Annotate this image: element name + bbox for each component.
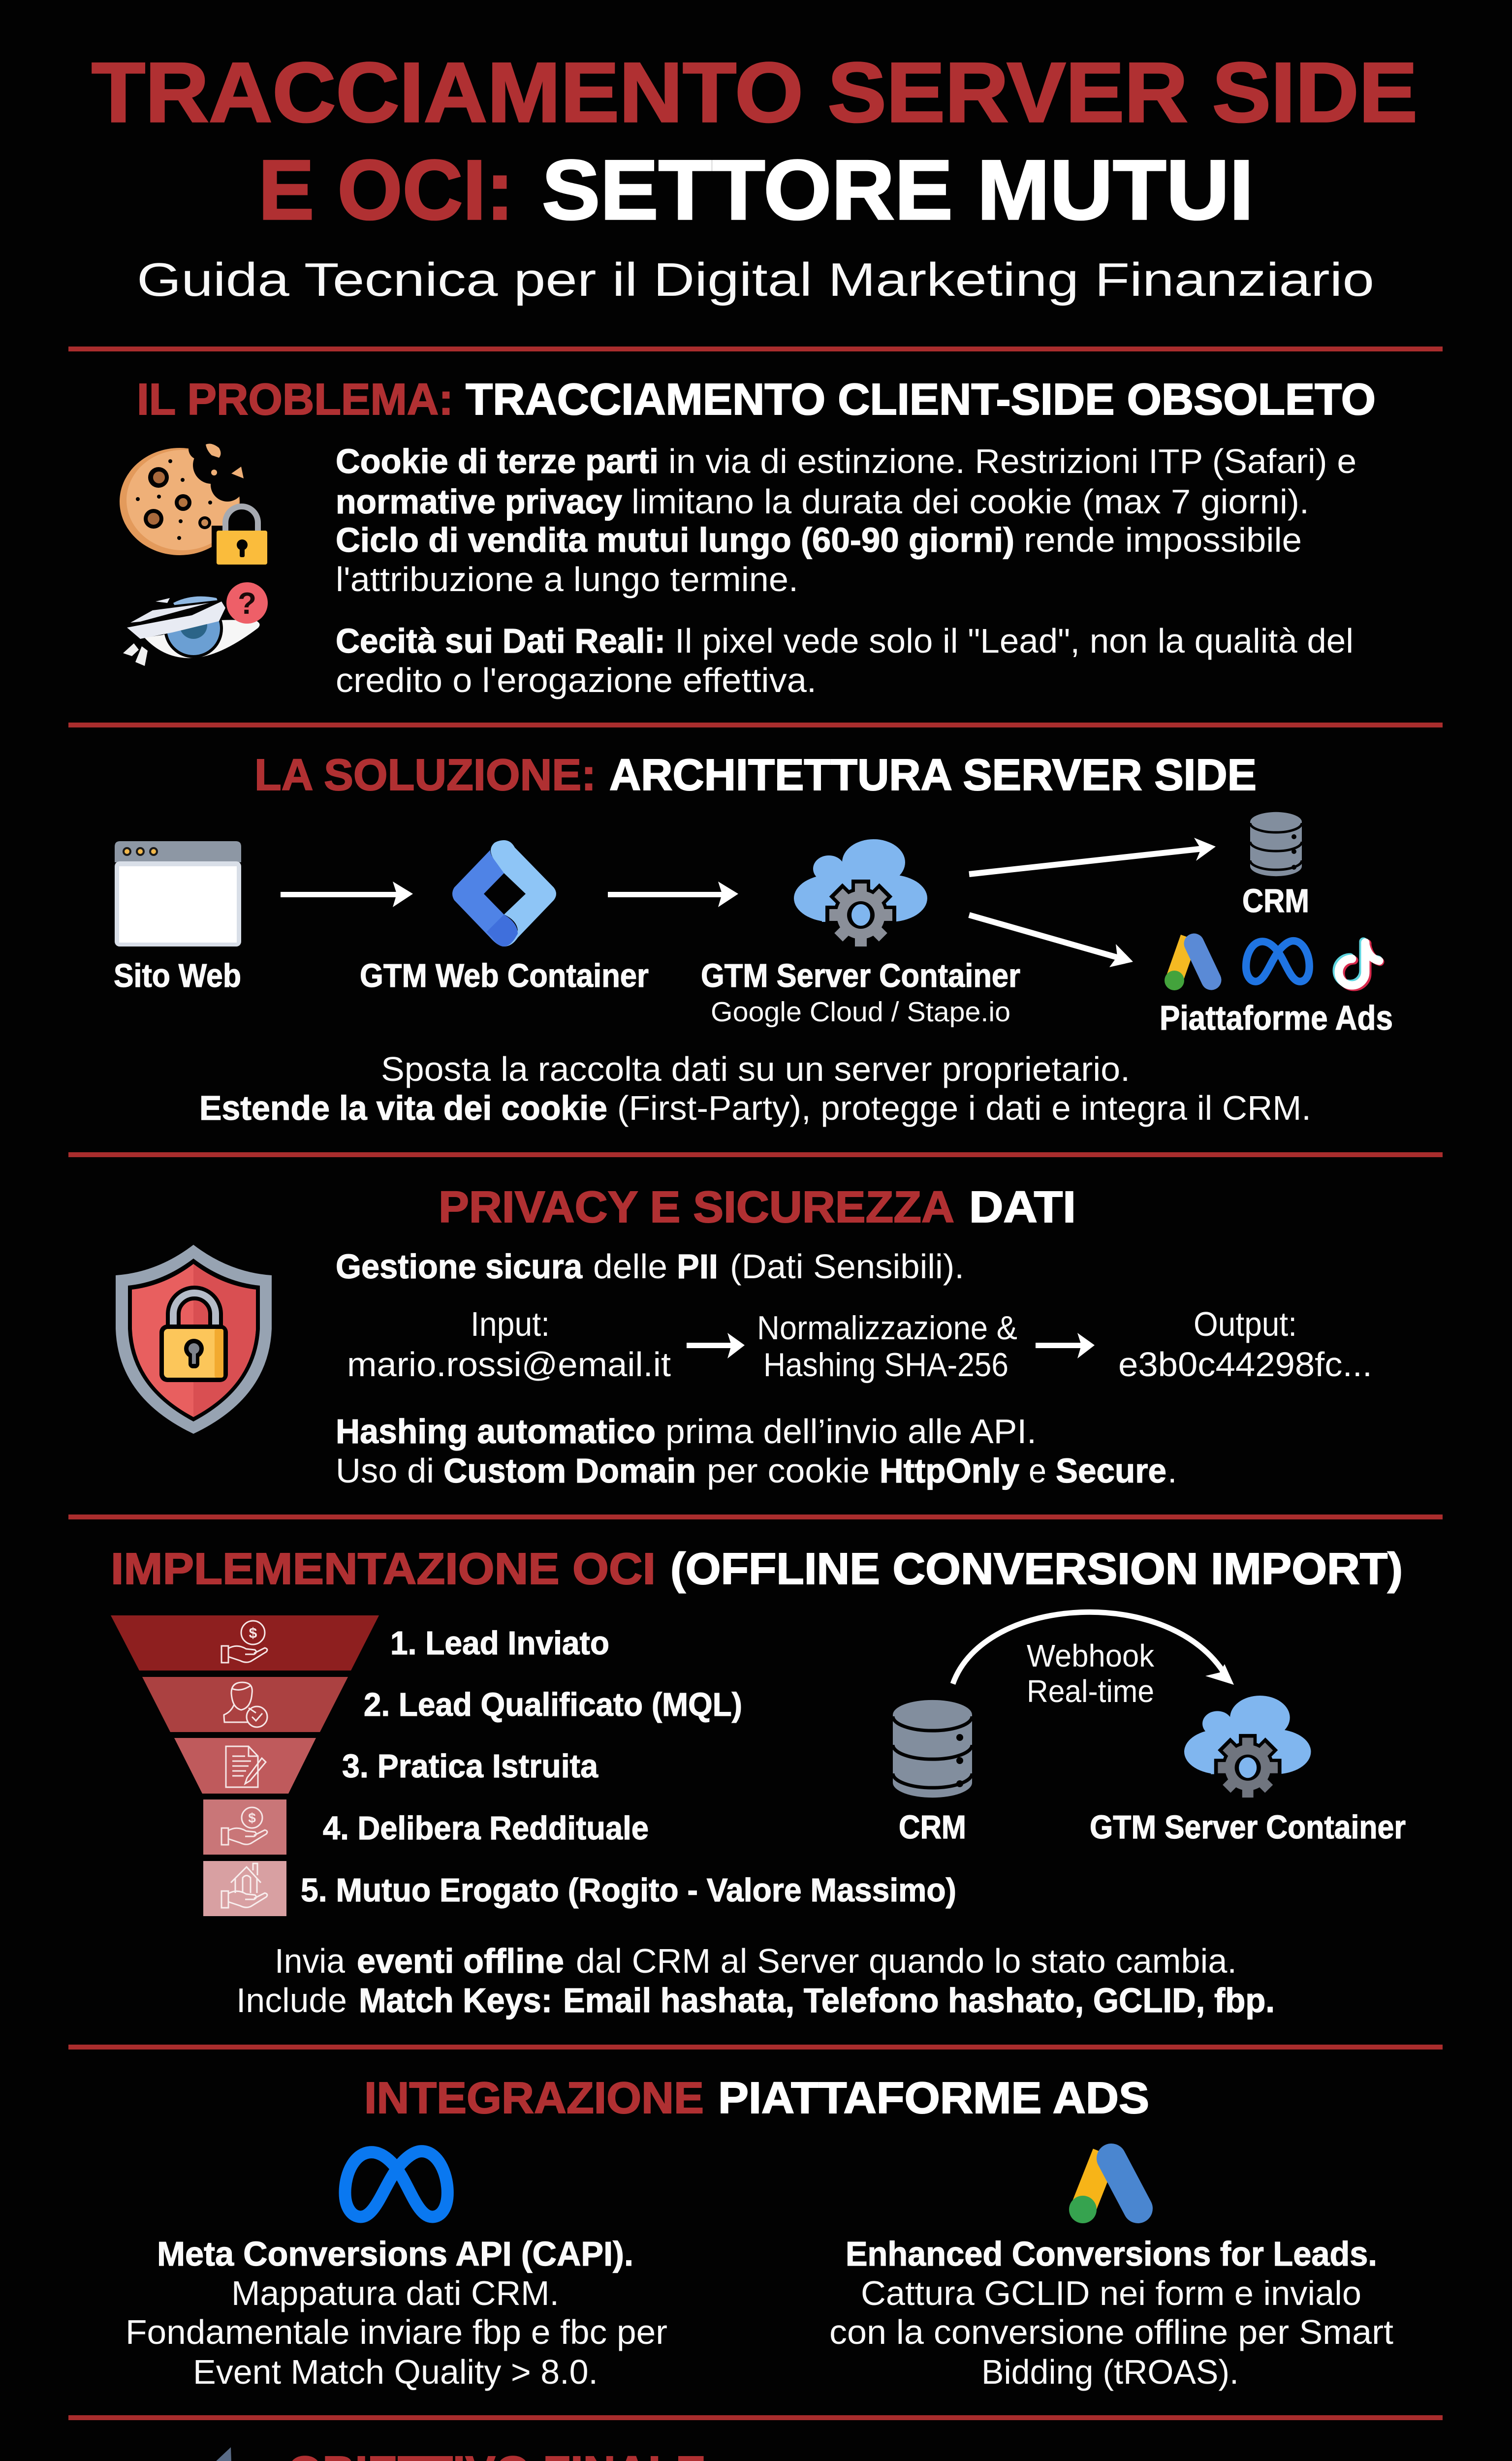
text: enhanced conversions: Enhanced Conversions for Leads. (846, 2235, 1377, 2273)
hashing flow: normalizzazione: Normalizzazione & (757, 1309, 1017, 1347)
funnel step 4 (203, 1799, 286, 1855)
hashing flow: output: Output: (1194, 1305, 1297, 1343)
text: eventi offline: eventi offline (357, 1942, 564, 1980)
panel: la soluzione (114, 751, 1393, 1127)
label: gtm web container: GTM Web Container (360, 957, 649, 994)
icon: cloud with gear (1184, 1696, 1311, 1801)
text: cookie e ciclo di vendita: l'attribuzione a lungo termine. (336, 560, 798, 599)
title: SETTORE MUTUI (542, 143, 1254, 237)
arrow: gtm web to gtm server (608, 882, 738, 907)
label: webhook real-time: Real-time (1027, 1673, 1154, 1709)
arrow: server to crm (969, 838, 1216, 874)
funnel step 1: $ (249, 1625, 257, 1641)
funnel step 5 (203, 1861, 286, 1916)
heading: la soluzione (254, 751, 1257, 800)
icon: crm database (1250, 812, 1302, 876)
icon: browser window (115, 841, 241, 947)
text: gestione sicura: Gestione sicura (336, 1247, 583, 1286)
text: eventi offline (236, 1942, 1275, 2019)
funnel labels: 3. Pratica Istruita (342, 1748, 598, 1785)
heading: integrazione: PIATTAFORME ADS (718, 2074, 1149, 2123)
text: cecità sui dati reali (336, 622, 1354, 699)
heading: integrazione (364, 2074, 1149, 2123)
title: E OCI: (258, 143, 514, 237)
text: hashing automatico: per cookie (707, 1451, 870, 1490)
hashing flow: output (1118, 1305, 1372, 1384)
hashing flow: normalizzazione (757, 1309, 1017, 1384)
text: hashing automatico: Custom Domain (443, 1451, 696, 1490)
text: eventi offline: Include (236, 1981, 347, 2019)
text: hashing automatico (336, 1412, 1177, 1490)
text: enhanced conversions (829, 2235, 1393, 2391)
text: cookie e ciclo di vendita: limitano la durata dei cookie (max 7 giorni). (631, 482, 1309, 521)
text: cookie e ciclo di vendita: Ciclo di vendita mutui lungo (60-90 giorni) (336, 521, 1014, 559)
text: cecità sui dati reali: credito o l'erogazione effettiva. (336, 661, 817, 699)
label: gtm server container: GTM Server Container (701, 957, 1020, 994)
funnel labels: 5. Mutuo Erogato (Rogito - Valore Massimo) (301, 1872, 956, 1909)
text: enhanced conversions: Cattura GCLID nei form e invialo (861, 2274, 1361, 2312)
hashing flow: input: mario.rossi@email.it (347, 1345, 671, 1384)
text: eventi offline: Email hashata, Telefono hashato, GCLID, fbp. (563, 1981, 1275, 2019)
label: crm: CRM (899, 1809, 966, 1846)
hashing flow: input: Input: (471, 1305, 550, 1343)
text: meta capi: Fondamentale inviare fbp e fbc per (126, 2313, 667, 2351)
icon: google ads (1165, 938, 1211, 990)
heading: implementazione oci (111, 1545, 1403, 1594)
funnel labels (301, 1625, 956, 1909)
text: hashing automatico: Hashing automatico (336, 1412, 656, 1451)
text: cecità sui dati reali: Il pixel vede solo il "Lead", non la qualità del (675, 622, 1354, 660)
text: gestione sicura: PII (677, 1247, 718, 1286)
funnel labels: 2. Lead Qualificato (MQL) (364, 1686, 742, 1723)
text: meta capi: Event Match Quality > 8.0. (193, 2353, 598, 2391)
text: meta capi (126, 2235, 667, 2391)
text: hashing automatico: Uso di (336, 1451, 434, 1490)
hashing flow: input (347, 1305, 671, 1384)
funnel step 3 (174, 1738, 316, 1794)
arrow: input to hashing (687, 1333, 745, 1358)
hashing flow: normalizzazione: Hashing SHA-256 (763, 1346, 1008, 1384)
heading: la soluzione: ARCHITETTURA SERVER SIDE (609, 751, 1257, 800)
heading: implementazione oci: (OFFLINE CONVERSION IMPORT) (670, 1545, 1403, 1594)
heading: implementazione oci: IMPLEMENTAZIONE OCI (111, 1545, 656, 1594)
text: soluzione description: Sposta la raccolta dati su un server proprietario. (381, 1050, 1130, 1088)
text: hashing automatico: e (1029, 1451, 1046, 1490)
panel: implementazione oci (111, 1545, 1406, 2019)
text: eventi offline: Invia (275, 1942, 345, 1980)
icon: google ads (1069, 2153, 1138, 2223)
label: gtm server container (701, 957, 1020, 1028)
subtitle: Guida Tecnica per il Digital Marketing Finanziario (137, 253, 1374, 306)
text: meta capi: Mappatura dati CRM. (231, 2274, 559, 2312)
text: hashing automatico: HttpOnly (880, 1451, 1019, 1490)
funnel (111, 1615, 379, 1916)
text: hashing automatico: Secure (1056, 1451, 1166, 1490)
icon: crm database (893, 1700, 972, 1798)
icon: meta (1246, 941, 1309, 981)
text: eventi offline: Match Keys: (359, 1981, 552, 2019)
text: gestione sicura: (Dati Sensibili). (730, 1247, 964, 1286)
text: soluzione description (199, 1050, 1311, 1127)
icon: tiktok (1337, 942, 1380, 987)
label: webhook real-time (1027, 1638, 1155, 1709)
text: cookie e ciclo di vendita: in via di estinzione. Restrizioni ITP (Safari) e (668, 442, 1356, 480)
label: gtm server container: GTM Server Container (1090, 1809, 1406, 1846)
text: cookie e ciclo di vendita: normative privacy (336, 482, 622, 521)
icon: target with dart (106, 2447, 248, 2461)
heading: privacy e sicurezza: DATI (969, 1183, 1076, 1232)
icon: cloud with gear (794, 839, 927, 950)
arrow: sito to gtm web (281, 882, 413, 907)
funnel step 1 (111, 1615, 379, 1671)
text: hashing automatico: . (1167, 1451, 1177, 1490)
icon: bitten cookie with padlock (120, 438, 272, 569)
label: gtm server container: Google Cloud / Stape.io (711, 996, 1010, 1028)
arrow: server to ads (969, 915, 1133, 967)
panel: il problema (120, 375, 1376, 699)
label: webhook real-time: Webhook (1027, 1638, 1155, 1673)
funnel labels: 1. Lead Inviato (390, 1625, 609, 1662)
icon: meta (345, 2151, 447, 2217)
funnel step 4: $ (248, 1810, 256, 1826)
funnel labels: 4. Delibera Reddituale (323, 1810, 649, 1847)
text: gestione sicura: delle (593, 1247, 667, 1286)
heading: la soluzione: LA SOLUZIONE: (254, 751, 596, 800)
title (92, 45, 1418, 237)
panel: integrazione piattaforme ads (126, 2074, 1393, 2391)
text: soluzione description: Estende la vita dei cookie (199, 1089, 607, 1127)
text: meta capi: Meta Conversions API (CAPI). (157, 2235, 633, 2273)
icon: gtm diamond (452, 840, 556, 947)
arrow: webhook arc (953, 1612, 1234, 1685)
label: crm: CRM (1242, 883, 1309, 919)
text: cecità sui dati reali: Cecità sui Dati Reali: (336, 622, 665, 660)
text: eventi offline: dal CRM al Server quando lo stato cambia. (576, 1942, 1237, 1980)
funnel step 2 (142, 1677, 348, 1732)
heading: privacy e sicurezza: PRIVACY E SICUREZZA (439, 1183, 954, 1232)
heading: integrazione: INTEGRAZIONE (364, 2074, 704, 2123)
text: cookie e ciclo di vendita: Cookie di terze parti (336, 442, 659, 480)
heading: il problema: TRACCIAMENTO CLIENT-SIDE OBSOLETO (466, 375, 1376, 424)
heading: il problema: IL PROBLEMA: (137, 375, 453, 424)
text: soluzione description: (First-Party), protegge i dati e integra il CRM. (617, 1089, 1311, 1127)
label: sito web: Sito Web (114, 957, 241, 994)
text: enhanced conversions: con la conversione offline per Smart (829, 2313, 1393, 2351)
text: gestione sicura (336, 1247, 964, 1286)
title: TRACCIAMENTO SERVER SIDE (92, 45, 1418, 140)
text: hashing automatico: prima dell’invio alle API. (665, 1412, 1037, 1451)
icon: blindfolded eye with question mark: ? (238, 587, 256, 621)
icon: blindfolded eye with question mark (123, 582, 268, 666)
label: piattaforme ads: Piattaforme Ads (1160, 999, 1393, 1037)
text: cookie e ciclo di vendita: rende impossibile (1024, 521, 1302, 559)
text: cookie e ciclo di vendita (336, 442, 1356, 599)
panel: privacy e sicurezza (116, 1183, 1372, 1490)
text: enhanced conversions: Bidding (tROAS). (981, 2353, 1239, 2391)
hashing flow: output: e3b0c44298fc... (1118, 1345, 1372, 1384)
arrow: hashing to output (1036, 1333, 1095, 1358)
icon: shield with padlock (116, 1245, 272, 1434)
panel: obiettivo finale (106, 2447, 1359, 2461)
